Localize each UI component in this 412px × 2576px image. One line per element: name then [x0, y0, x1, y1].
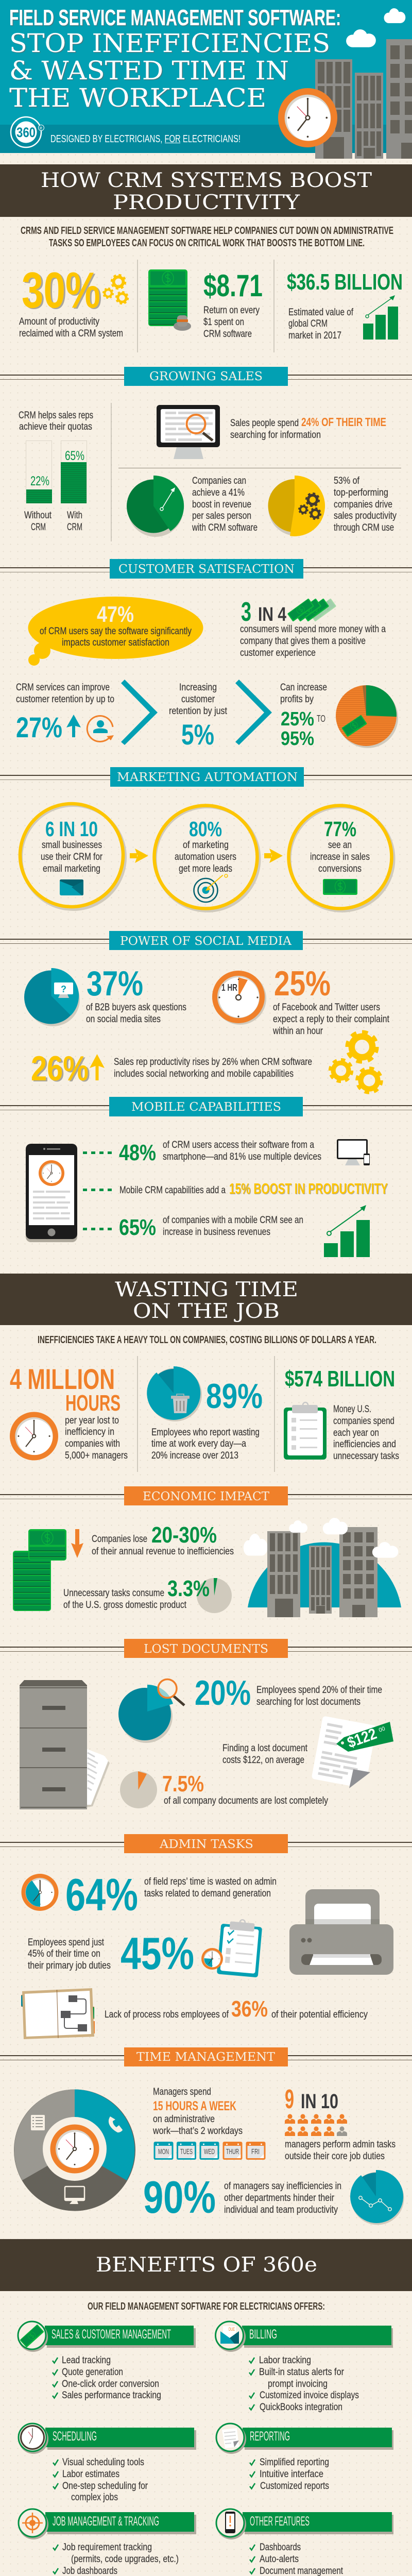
stat: 15 percent boost: Mobile CRM capabilities add a: [119, 1185, 226, 1196]
icon: 1 hour clock: 1 HR: [221, 982, 237, 993]
logo 360e: [11, 117, 44, 147]
panel: billing: prompt invoicing: [268, 2379, 328, 2389]
stat: 25 percent: within an hour: [272, 1026, 323, 1037]
panel: reporting: Simplified reporting: [260, 2457, 329, 2468]
stat: 36 percent: Lack of process robs employees of: [105, 2009, 229, 2020]
panel: 80 percent circle: of marketing: [183, 840, 229, 851]
icon: money stacks: [13, 1530, 66, 1611]
panel: 80 percent circle: get more leads: [179, 863, 232, 874]
stat: 3 in 4: customer experience: [240, 648, 316, 658]
stat: 20-30 percent: [92, 1522, 234, 1557]
icon: calendars: [153, 2142, 266, 2160]
banner: wasting time on the job: WASTING TIME: [115, 1278, 298, 1301]
stat: 8.71 dollars: $1 spent on: [203, 317, 244, 328]
section heading: admin tasks: ADMIN TASKS: [159, 1838, 253, 1851]
stat: 26 percent: [31, 1049, 312, 1088]
stat: 37 percent: of B2B buyers ask questions: [86, 1002, 186, 1013]
stat: 48 percent: 48%: [119, 1140, 156, 1165]
stat: 3.3 percent: of the U.S. gross domestic product: [63, 1600, 187, 1611]
section heading: power of social media: POWER OF SOCIAL MEDIA: [120, 935, 291, 948]
text: 53 percent: through CRM use: [334, 522, 394, 533]
stat: 36.5 billion: Estimated value of: [288, 307, 354, 318]
banner: benefits of 360e: BENEFITS OF 360e: [96, 2253, 317, 2277]
text: 53 percent: 53% of: [334, 476, 360, 486]
stat: 27 percent retention: customer retention by up to: [16, 694, 114, 705]
panel: quotas bar chart: 65%: [65, 449, 84, 463]
stat: 15 percent boost: [119, 1181, 388, 1197]
stat: 20 percent: [195, 1673, 382, 1713]
section heading: time management: [0, 2047, 412, 2066]
banner: how crm systems boost productivity: [0, 164, 412, 217]
stat: 4 million hours: inefficiency in: [65, 1427, 114, 1437]
icon: calendars: THUR: [226, 2147, 239, 2156]
stat: 7.5 percent: [162, 1771, 328, 1806]
stat: 574 billion: Money U.S.: [333, 1404, 371, 1415]
stat: 15 hours a week: [152, 2087, 243, 2137]
icon: document with price tag: [312, 1716, 393, 1794]
panel: scheduling: [19, 2424, 196, 2503]
text: 41 percent boost: boost in revenue: [192, 499, 251, 510]
stat: 89 percent: [147, 1366, 263, 1461]
stat: profits 25 to 95 percent: 95%: [281, 728, 314, 750]
stat: 15 hours a week: work—that’s 2 workdays: [152, 2126, 243, 2137]
panel: scheduling: One-step scheduling for: [62, 2481, 148, 2492]
stat: profits 25 to 95 percent: profits by: [280, 694, 314, 705]
panel: billing: QuickBooks integration: [260, 2402, 342, 2413]
icon: filing cabinet: [20, 1680, 110, 1809]
section heading: power of social media: [0, 931, 412, 950]
title: STOP INEFFICIENCIES: [9, 28, 330, 58]
stat: 15 hours a week: on administrative: [153, 2114, 215, 2125]
stat: 90 percent: 90%: [143, 2172, 216, 2223]
icon: calendars: FRI: [251, 2147, 260, 2156]
panel: job management and tracking: Job requirement tracking: [62, 2542, 152, 2553]
stat: 4 million hours: companies with: [65, 1438, 120, 1449]
stat: 574 billion: [284, 1366, 399, 1462]
text: finding a lost document: Finding a lost document: [222, 1743, 308, 1754]
icon: teal clipboard: [217, 1918, 263, 1977]
icon: monitor: [64, 2187, 85, 2204]
section heading: mobile capabilities: MOBILE CAPABILITIES: [131, 1100, 281, 1114]
stat: 3.3 percent: Unnecessary tasks consume: [63, 1588, 164, 1599]
stat: 48 percent: of CRM users access their software from a: [163, 1140, 314, 1150]
title: [9, 5, 341, 113]
stat: 89 percent: time at work every day—a: [151, 1438, 246, 1449]
panel: quotas bar chart: CRM helps sales reps: [19, 410, 93, 421]
panel: other features: Dashboards: [260, 2542, 301, 2553]
pie: gdp: [197, 1578, 232, 1613]
panel: sales and customer management: Sales performance tracking: [62, 2390, 161, 2401]
stat: 36.5 billion: [287, 269, 403, 341]
stat: 3.3 percent: 3.3%: [167, 1576, 210, 1601]
stat: profits 25 to 95 percent: 25%: [281, 708, 314, 730]
stat: 48 percent: smartphone—and 81% use multiple devices: [163, 1151, 321, 1162]
stat: 9 in 10: 9: [285, 2084, 294, 2114]
stat: 5 percent: retention by just: [169, 706, 228, 717]
panel: quotas bar chart: achieve their quotas: [19, 421, 92, 432]
stat: 25 percent: [272, 964, 390, 1037]
stat: 3.3 percent: [63, 1576, 210, 1611]
stat: 3 in 4: 3: [241, 597, 251, 627]
stat: 37 percent: [86, 964, 186, 1025]
stat: 30 percent: Amount of productivity: [19, 316, 99, 327]
panel: billing: DUE: [229, 2327, 235, 2332]
icon: document with price tag: $122: [345, 1725, 379, 1752]
section heading: marketing automation: MARKETING AUTOMATION: [117, 771, 298, 784]
panel: quotas bar chart: Without: [24, 510, 52, 521]
stat: 9 in 10: outside their core job duties: [285, 2151, 385, 2162]
callout: 47 percent bubble: 47%: [97, 602, 134, 627]
section heading: time management: TIME MANAGEMENT: [136, 2050, 276, 2064]
icon: clock 64 percent: [22, 1874, 59, 1911]
stat: 30 percent: 30%: [22, 262, 100, 318]
chart: donut with clock: [14, 2090, 135, 2211]
text: 41 percent boost: [192, 476, 258, 533]
stat: 20 percent: Employees spend 20% of their time: [256, 1685, 382, 1696]
text: 24 percent of their time: 24% OF THEIR TIME: [301, 415, 386, 429]
icon: calendars: TUES: [180, 2147, 193, 2156]
callout: 47 percent bubble: [28, 597, 203, 666]
icon: yellow gears: [330, 1032, 381, 1092]
section heading: admin tasks: [0, 1834, 412, 1853]
panel: sales and customer management: One-click order conversion: [62, 2379, 159, 2389]
panel: quotas bar chart: CRM: [31, 522, 46, 533]
panel: reporting: Customized reports: [260, 2481, 329, 2492]
panel: reporting: Intuitive interface: [260, 2469, 323, 2480]
text: 24 percent of their time: searching for information: [230, 430, 321, 440]
stat: 89 percent: Employees who report wasting: [151, 1427, 260, 1438]
pie: 7.5 percent: [120, 1771, 157, 1808]
panel: quotas bar chart: [19, 403, 111, 541]
stat: 65 percent: of companies with a mobile CRM see an: [163, 1215, 303, 1226]
panel: 6 in 10 circle: 6 IN 10: [45, 817, 98, 841]
stat: 64 percent: of field reps’ time is wasted on admin: [144, 1876, 277, 1887]
stat: 8.71 dollars: $8.71: [203, 268, 263, 303]
section heading: lost documents: LOST DOCUMENTS: [144, 1642, 268, 1656]
stat: 90 percent: of managers say inefficiencies in: [224, 2181, 341, 2192]
pie: 53 percent: [268, 476, 325, 536]
panel: wasted stats: [10, 1356, 399, 1472]
stat: 3 in 4: company that gives them a positive: [240, 636, 366, 647]
stat: 26 percent: 26%: [31, 1049, 89, 1088]
stat: 30 percent: reclaimed with a CRM system: [19, 328, 123, 339]
stat: 45 percent: [28, 1928, 194, 1979]
stat: 20-30 percent: of their annual revenue to inefficiencies: [92, 1546, 234, 1557]
panel: quotas bar chart: 22%: [30, 474, 49, 488]
stat: 574 billion: companies spend: [333, 1416, 394, 1427]
stat: 36 percent: of their potential efficiency: [271, 2009, 368, 2020]
arrow: yellow right: [264, 849, 283, 863]
icon: envelope: [60, 879, 83, 895]
stat: 4 million hours: HOURS: [65, 1391, 121, 1416]
stat: 3 in 4: IN 4: [258, 604, 286, 625]
icon: calendars: MON: [158, 2147, 169, 2156]
stat: 574 billion: each year on: [333, 1428, 379, 1438]
icon: 1 hour clock: [212, 971, 266, 1025]
title: & WASTED TIME IN: [9, 56, 289, 86]
stat: 8.71 dollars: [149, 268, 263, 340]
arrow: yellow right: [130, 849, 148, 863]
panel: scheduling: complex jobs: [71, 2492, 118, 2503]
stat: 8.71 dollars: Return on every: [203, 305, 260, 316]
panel: 77 percent circle: 77%: [324, 817, 356, 841]
icon: monitor with magnifier: [157, 405, 220, 459]
stat: 4 million hours: 4 MILLION: [10, 1363, 115, 1395]
stat: 574 billion: inefficiencies and: [333, 1439, 396, 1450]
panel: 80 percent circle: automation users: [175, 852, 236, 862]
arrow: down orange: [71, 1529, 83, 1558]
panel: quotas bar chart: With: [67, 510, 82, 521]
stat: 90 percent: individual and team productivity: [224, 2205, 338, 2215]
stat: 5 percent: 5%: [181, 718, 214, 751]
panel: 6 in 10 circle: use their CRM for: [41, 852, 103, 862]
icon: dollar bill: [323, 879, 357, 895]
stat: 48 percent: [119, 1140, 321, 1165]
panel: 80 percent circle: [154, 806, 260, 911]
panel: 77 percent circle: [288, 806, 393, 911]
section heading: growing sales: [0, 367, 412, 386]
icon: clouds: [346, 8, 405, 47]
stat: 45 percent: 45%: [121, 1928, 194, 1979]
stat: 15 hours a week: 15 HOURS A WEEK: [153, 2099, 236, 2113]
text: 53 percent: top-performing: [334, 487, 388, 498]
icon: buildings: [315, 39, 412, 159]
stat: 20-30 percent: Companies lose: [92, 1534, 147, 1545]
stat: 36 percent: 36%: [231, 1996, 268, 2022]
title: THE WORKPLACE: [9, 83, 266, 113]
stat: 8.71 dollars: CRM software: [203, 329, 252, 340]
panel: 6 in 10 circle: small businesses: [42, 840, 102, 851]
panel: reporting: REPORTING: [250, 2429, 290, 2444]
text: 53 percent: sales productivity: [334, 511, 397, 521]
pie: 37 percent: [24, 968, 80, 1026]
dashes: connector 65 percent: [83, 1228, 112, 1230]
stat: 5 percent: Increasing: [179, 682, 217, 693]
text: 53 percent: companies drive: [334, 499, 392, 510]
stat: 36 percent: [105, 1996, 368, 2022]
panel: quotas bar chart: CRM: [67, 522, 82, 533]
text: 53 percent: [334, 476, 397, 533]
stat: 4 million hours: 5,000+ managers: [65, 1450, 128, 1461]
icon: phone: [109, 2116, 123, 2132]
stat: 65 percent: increase in business revenues: [163, 1227, 270, 1238]
panel: other features: OTHER FEATURES: [250, 2514, 310, 2529]
dashes: connector 48 percent: [83, 1151, 112, 1154]
stat: 64 percent: 64%: [65, 1869, 138, 1920]
icon: target: [194, 874, 228, 902]
stat: 5 percent: customer: [181, 694, 215, 705]
stat: 25 percent: of Facebook and Twitter users: [273, 1002, 380, 1013]
section heading: mobile capabilities: [0, 1097, 412, 1116]
stat: 4 million hours: per year lost to: [65, 1415, 119, 1426]
text: 41 percent boost: achieve a 41%: [192, 487, 245, 498]
stat: 89 percent: 89%: [206, 1377, 263, 1416]
banner: benefits of 360e: [0, 2239, 412, 2291]
stat: 9 in 10: IN 10: [301, 2090, 338, 2113]
panel: top stats: [19, 260, 403, 352]
panel: billing: BILLING: [249, 2327, 277, 2342]
stat: 37 percent: 37%: [87, 964, 143, 1003]
icon: list: [31, 2115, 45, 2130]
section heading: growing sales: GROWING SALES: [149, 370, 263, 383]
stat: 37 percent: on social media sites: [86, 1014, 161, 1025]
pie: 37 percent: ?: [61, 984, 66, 994]
stat: 20 percent: searching for lost documents: [256, 1697, 360, 1707]
stat: 15 hours a week: Managers spend: [153, 2087, 211, 2097]
stat: 27 percent retention: CRM services can improve: [16, 682, 110, 693]
stat: 36.5 billion: market in 2017: [288, 330, 341, 341]
stat: 30 percent: [19, 262, 128, 339]
stat: 65 percent: [119, 1215, 303, 1240]
text: 41 percent boost: Companies can: [192, 476, 246, 486]
text: finding a lost document: [222, 1743, 308, 1766]
stat: 7.5 percent: of all company documents are lost completely: [164, 1795, 328, 1806]
logo 360e: e: [40, 125, 42, 130]
intro text: [21, 225, 393, 249]
section heading: economic impact: [0, 1486, 412, 1505]
text: 24 percent of their time: [230, 415, 386, 440]
stat: 45 percent: 45% of their time on: [28, 1948, 100, 1959]
stat: 27 percent retention: [16, 682, 114, 743]
stat: profits 25 to 95 percent: Can increase: [280, 682, 327, 693]
icon: notebook with flowchart: [21, 1988, 95, 2039]
tagline: DESIGNED BY ELECTRICIANS, FOR ELECTRICIANS!: [50, 133, 241, 145]
panel: reporting: [216, 2424, 393, 2492]
stat: 26 percent: includes social networking and mobile capabilities: [114, 1069, 294, 1079]
stat: profits 25 to 95 percent: [280, 682, 327, 750]
banner: how crm systems boost productivity: PRODUCTIVITY: [113, 191, 300, 214]
stat: 90 percent: other departments hinder their: [224, 2193, 335, 2204]
pie: 90 percent with line chart: [350, 2170, 404, 2225]
icon: clock: [278, 88, 337, 147]
text: 24 percent of their time: Sales people spend: [230, 418, 299, 429]
panel: job management and tracking: JOB MANAGEMENT & TRACKING: [53, 2514, 159, 2529]
header panel: [0, 0, 412, 159]
arrow: chevron: [235, 680, 272, 745]
section heading: customer satisfaction: CUSTOMER SATISFACTION: [118, 563, 295, 576]
panel: 77 percent circle: see an: [328, 840, 352, 851]
text: finding a lost document: costs $122, on average: [222, 1755, 304, 1766]
stat: 36.5 billion: global CRM: [288, 318, 328, 329]
panel: scheduling: Labor estimates: [62, 2469, 119, 2480]
chart: rising bars: [324, 1205, 370, 1257]
panel: other features: Auto-alerts: [260, 2554, 299, 2565]
stat: profits 25 to 95 percent: TO: [317, 714, 325, 724]
pie: 20 percent with magnifier: [118, 1680, 184, 1743]
banner: wasting time on the job: [0, 1274, 412, 1325]
panel: 80 percent circle: 80%: [189, 817, 222, 841]
stat: 26 percent: Sales rep productivity rises by 26% when CRM software: [114, 1057, 312, 1067]
stat: 574 billion: unnecessary tasks: [333, 1451, 399, 1462]
stat: 20-30 percent: 20-30%: [151, 1522, 217, 1548]
panel: sales and customer management: Lead tracking: [62, 2355, 111, 2366]
panel: sales and customer management: [18, 2321, 196, 2401]
stat: 9 in 10: [285, 2084, 396, 2162]
stat: 45 percent: their primary job duties: [28, 1960, 111, 1971]
panel: scheduling: Visual scheduling tools: [62, 2457, 144, 2468]
text: 41 percent boost: per sales person: [192, 511, 251, 521]
icon: city dome: [244, 1518, 401, 1617]
icon: document with price tag: 00: [378, 1725, 386, 1734]
icon: calendars: WED: [204, 2147, 215, 2156]
callout: 47 percent bubble: impacts customer satisfaction: [62, 637, 169, 648]
panel: sales and customer management: Quote generation: [62, 2367, 123, 2378]
pie: 41 percent boost: [127, 476, 184, 537]
stat: 89 percent: 20% increase over 2013: [151, 1450, 238, 1461]
section heading: lost documents: [0, 1639, 412, 1658]
icon: smartphone with clock: [26, 1144, 77, 1242]
section heading: customer satisfaction: [0, 559, 412, 579]
stat: 25 percent: expect a reply to their complaint: [273, 1014, 390, 1025]
pie: profits: [336, 685, 398, 748]
stat: 64 percent: tasks related to demand generation: [144, 1888, 271, 1899]
icon: people: [285, 2114, 347, 2136]
arrow: chevron: [121, 680, 158, 745]
stat: 3 in 4: [240, 597, 386, 658]
panel: billing: Labor tracking: [259, 2355, 311, 2366]
panel: other features: [216, 2509, 393, 2576]
stat: 65 percent: 65%: [119, 1215, 156, 1240]
logo 360e: 360: [16, 125, 36, 140]
stat: 4 million hours: [10, 1363, 128, 1461]
stat: 5 percent: [169, 682, 228, 751]
panel: scheduling: SCHEDULING: [53, 2429, 97, 2444]
banner: how crm systems boost productivity: HOW CRM SYSTEMS BOOST: [41, 169, 372, 192]
panel: 6 in 10 circle: [20, 804, 125, 909]
stat: 7.5 percent: 7.5%: [162, 1771, 204, 1797]
icon: monitor and phone: [337, 1139, 370, 1165]
icon: small clock 45 percent: [201, 1948, 223, 1970]
icon: printer: [289, 1889, 393, 1975]
callout: 47 percent bubble: of CRM users say the software significantly: [40, 626, 192, 637]
panel: job management and tracking: (permits, code upgrades, etc.): [71, 2554, 179, 2565]
dashes: connector productivity: [83, 1189, 112, 1191]
stat: 20 percent: 20%: [195, 1673, 251, 1713]
section heading: marketing automation: [0, 767, 412, 787]
text: 41 percent boost: with CRM software: [192, 522, 258, 533]
panel: 6 in 10 circle: email marketing: [43, 863, 100, 874]
section heading: economic impact: ECONOMIC IMPACT: [143, 1490, 270, 1503]
stat: 64 percent: [65, 1869, 277, 1920]
panel: job management and tracking: [19, 2509, 196, 2576]
stat: 25 percent: 25%: [274, 964, 331, 1003]
panel: 77 percent circle: conversions: [318, 863, 362, 874]
panel: billing: Built-in status alerts for: [259, 2367, 345, 2378]
panel: billing: [215, 2321, 393, 2413]
panel: 77 percent circle: increase in sales: [310, 852, 370, 862]
panel: billing: Customized invoice displays: [260, 2390, 359, 2401]
panel: sales and customer management: SALES & CUSTOMER MANAGEMENT: [52, 2327, 171, 2342]
stat: 45 percent: Employees spend just: [28, 1937, 105, 1948]
stat: 27 percent retention: 27%: [16, 711, 62, 743]
stat: 90 percent: [143, 2172, 341, 2223]
banner: wasting time on the job: ON THE JOB: [133, 1300, 280, 1323]
